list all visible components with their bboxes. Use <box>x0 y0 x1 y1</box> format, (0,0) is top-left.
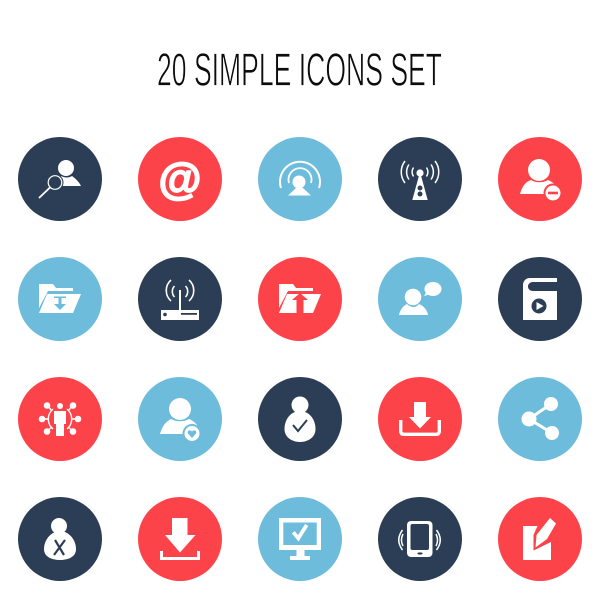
icon: audio book <box>498 257 582 341</box>
icon: person network <box>18 377 102 461</box>
icon: edit document <box>498 497 582 581</box>
icon: search user <box>18 137 102 221</box>
icon: download arrow <box>138 497 222 581</box>
icon: folder upload <box>258 257 342 341</box>
icon: at sign: @ <box>159 154 201 204</box>
icon: remove user <box>498 137 582 221</box>
icon: broadcasting person <box>258 137 342 221</box>
icon: wifi router <box>138 257 222 341</box>
icon: favorite user <box>138 377 222 461</box>
icon: folder download <box>18 257 102 341</box>
icon: person with speech bubble <box>378 257 462 341</box>
icon: share <box>498 377 582 461</box>
icon: radio tower <box>378 137 462 221</box>
icon: vibrating phone <box>378 497 462 581</box>
icon: rejected person <box>18 497 102 581</box>
icon: download to tray <box>378 377 462 461</box>
icon: at sign <box>138 137 222 221</box>
icon: monitor with check <box>258 497 342 581</box>
icon: verified person <box>258 377 342 461</box>
